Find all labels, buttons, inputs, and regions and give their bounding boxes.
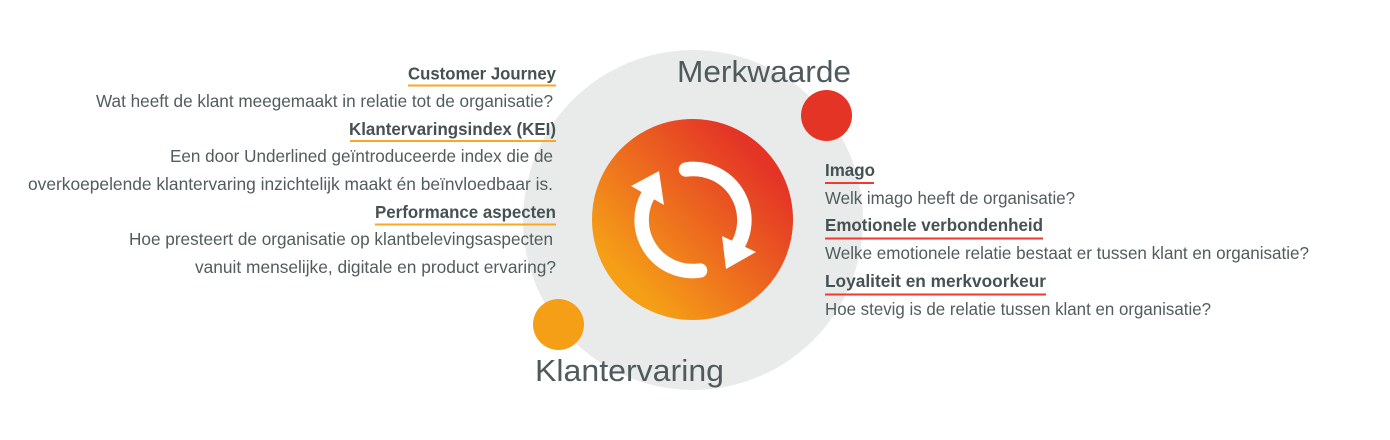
body: performance aspecten: Hoe presteert de organisatie op klantbelevingsaspecten: [129, 229, 553, 249]
heading: Customer Journey: Customer Journey: [408, 64, 556, 84]
dot: merkwaarde: [801, 90, 852, 141]
arrow: clockwise left: [631, 171, 700, 271]
central cycle icon: [592, 119, 793, 320]
heading: Performance aspecten: Performance aspecten: [375, 202, 556, 222]
text block: merkwaarde: [825, 160, 1309, 319]
text block: klantervaring: [28, 64, 556, 277]
body: klantervaringsindex: [28, 146, 553, 194]
title: Merkwaarde: Merkwaarde: [677, 54, 851, 89]
body: performance aspecten: [129, 229, 556, 277]
body: performance aspecten: vanuit menselijke, digitale en product ervaring?: [195, 257, 556, 277]
background circle: [523, 50, 863, 390]
dot: klantervaring: [533, 299, 584, 350]
body: klantervaringsindex: Een door Underlined geïntroduceerde index die de: [170, 146, 553, 166]
body: imago: Welk imago heeft de organisatie?: [825, 188, 1075, 208]
arrow: clockwise right: [686, 169, 756, 269]
body: customer journey: Wat heeft de klant meegemaakt in relatie tot de organisatie?: [96, 91, 553, 111]
heading: Imago: Imago: [825, 160, 875, 180]
body: emotionele verbondenheid: Welke emotionele relatie bestaat er tussen klant en organisatie?: [825, 243, 1309, 263]
heading: Emotionele verbondenheid: Emotionele verbondenheid: [825, 215, 1043, 235]
gradient disc: [592, 119, 793, 320]
title: Klantervaring: Klantervaring: [535, 353, 724, 388]
body: klantervaringsindex: overkoepelende klantervaring inzichtelijk maakt én beïnvloedbaar is.: [28, 174, 553, 194]
heading: Loyaliteit en merkvoorkeur: Loyaliteit en merkvoorkeur: [825, 271, 1046, 291]
body: loyaliteit: Hoe stevig is de relatie tussen klant en organisatie?: [825, 299, 1211, 319]
heading: Klantervaringsindex: Klantervaringsindex (KEI): [349, 119, 556, 139]
